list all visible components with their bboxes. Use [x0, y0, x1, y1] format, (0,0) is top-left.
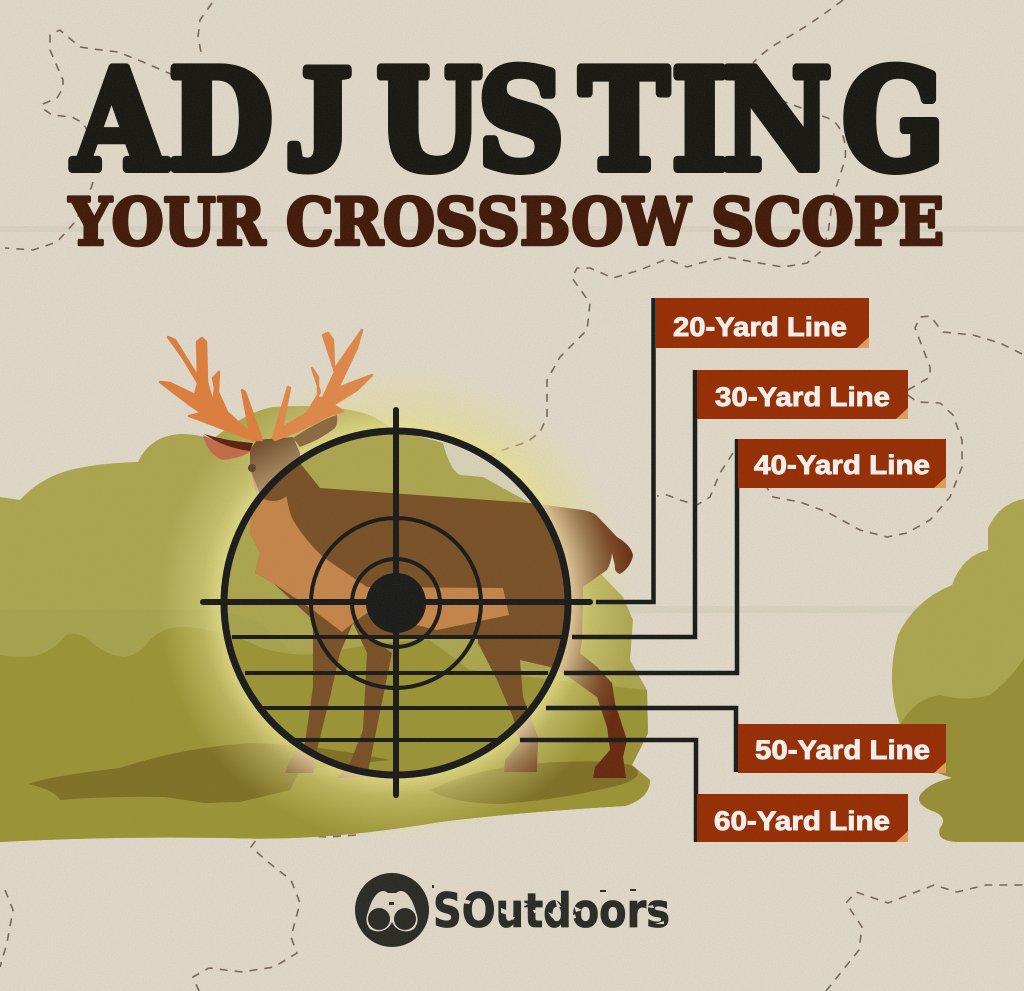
- inner ring: [352, 559, 440, 647]
- logo badge: [355, 873, 429, 947]
- title: adjusting: [71, 33, 945, 202]
- label: 40-yard line: 40-Yard Line: [754, 450, 930, 480]
- right antler: [273, 330, 372, 440]
- outer ring: [224, 431, 568, 775]
- crosshair reticle: [203, 410, 590, 795]
- deer head: [250, 437, 300, 500]
- deer body in scope: [250, 464, 564, 770]
- throat shade: [264, 487, 286, 501]
- right bush: [892, 499, 1024, 842]
- title: adjusting: J: [285, 33, 351, 202]
- label: 60-yard line: 60-Yard Line: [714, 806, 890, 836]
- horizontal crosshair: [203, 599, 590, 605]
- stadia lines: [232, 637, 563, 740]
- vertical crosshair: [393, 410, 399, 795]
- subtitle: your crossbow scope: YOUR CROSSBOW SCOPE: [68, 184, 944, 260]
- title: adjusting: A: [71, 39, 168, 202]
- eye: [248, 464, 256, 472]
- title: adjusting: U: [377, 39, 481, 202]
- label: 20-yard line: [656, 298, 869, 348]
- label: 30-yard line: [697, 370, 908, 419]
- left landscape bushes: [0, 406, 650, 842]
- label: 60-yard line: [697, 794, 908, 842]
- label: 30-yard line: 30-Yard Line: [715, 382, 890, 412]
- title: adjusting: I: [672, 39, 728, 202]
- leader lines: [520, 298, 737, 842]
- label: 20-yard line: 20-Yard Line: [673, 312, 847, 342]
- left ear: [203, 435, 253, 460]
- wordmark distress marks: [461, 898, 664, 924]
- right ear: [293, 415, 337, 447]
- deer chest: [250, 487, 509, 632]
- centre dot: [366, 573, 426, 633]
- paper fold marks: [0, 226, 1024, 613]
- left antler: [160, 337, 262, 440]
- title: adjusting: N: [722, 39, 832, 202]
- wordmark debris: [432, 885, 636, 892]
- scope interior view: [228, 434, 564, 772]
- logo: [355, 873, 670, 947]
- deer outside the scope: [160, 330, 633, 778]
- icon: binoculars: [366, 891, 418, 931]
- title: adjusting: D: [169, 39, 273, 202]
- label: 50-yard line: [738, 724, 946, 773]
- label: 40-yard line: [738, 439, 946, 488]
- label: 50-yard line: 50-Yard Line: [755, 735, 930, 765]
- logo wordmark: SOutdoors: [433, 884, 670, 939]
- middle ring: [311, 518, 481, 688]
- title: adjusting: T: [579, 39, 669, 202]
- scope glow: [158, 365, 634, 841]
- title: adjusting: G: [842, 39, 945, 202]
- title: adjusting: S: [478, 39, 564, 202]
